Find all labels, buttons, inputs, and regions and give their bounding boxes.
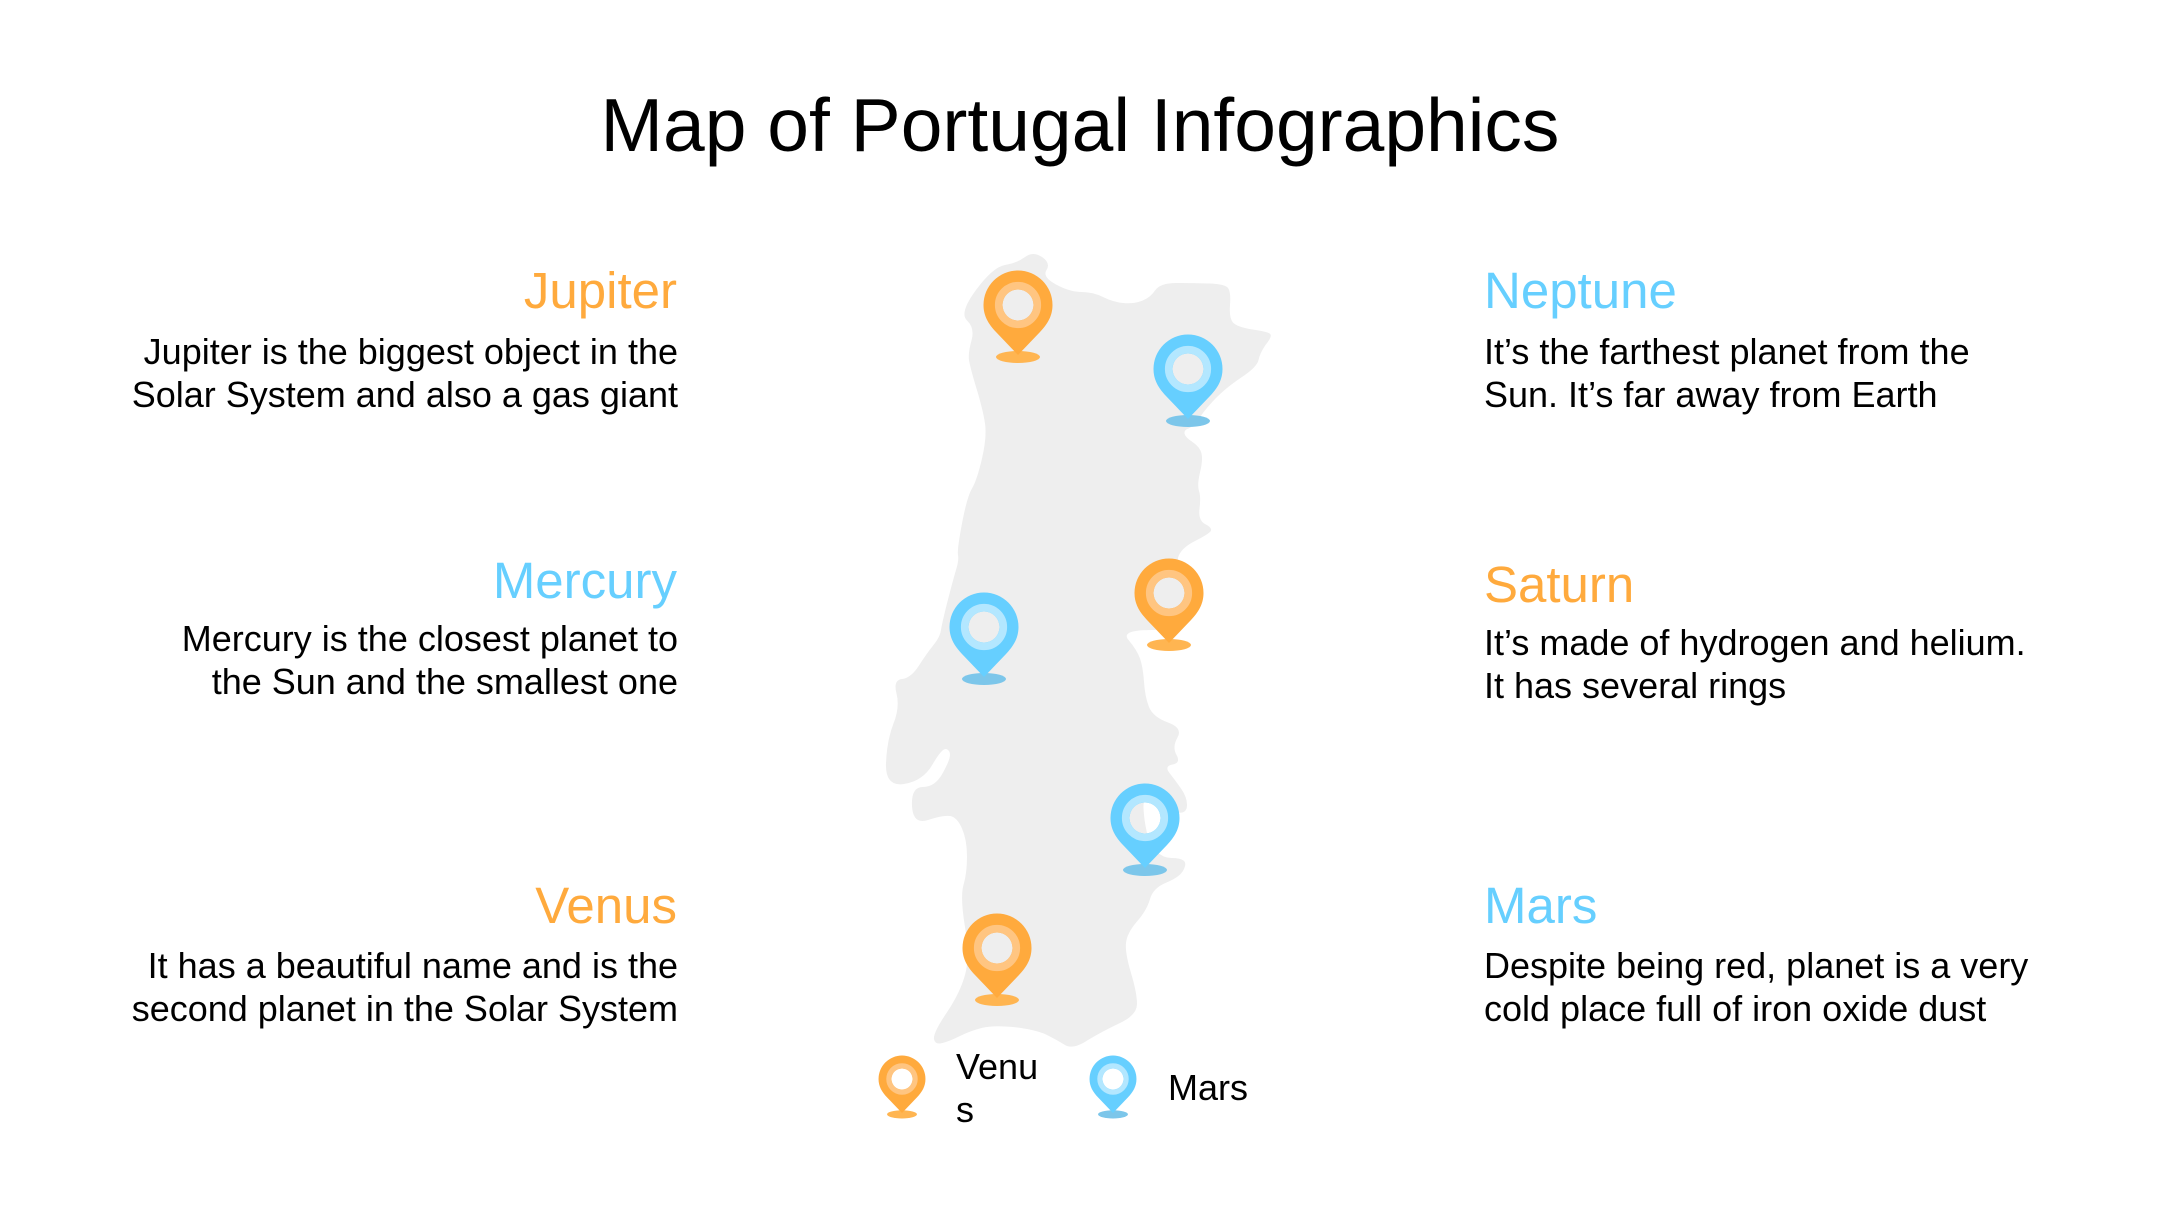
pin: Neptune blue xyxy=(1154,334,1222,427)
text block: Neptune: Sun. It’s far away from Earth xyxy=(1484,374,1938,415)
text block: Venus xyxy=(132,877,678,1029)
text block: Mercury xyxy=(182,552,678,702)
text block: Venus: Venus xyxy=(535,877,677,934)
pin: Mars blue xyxy=(1110,784,1180,876)
text block: Neptune xyxy=(1484,262,1970,415)
pin: Jupiter orange xyxy=(984,270,1052,363)
text block: Mercury: the Sun and the smallest one xyxy=(212,661,678,702)
text block: Saturn: It’s made of hydrogen and helium. xyxy=(1484,622,2026,663)
text block: Mars xyxy=(1484,877,2028,1029)
text block: Jupiter: Jupiter xyxy=(524,262,677,319)
text block: Venus: It has a beautiful name and is the xyxy=(148,945,678,986)
text block: Mars: Mars xyxy=(1484,877,1597,934)
text block: Saturn xyxy=(1484,556,2026,706)
legend label: Mars: Mars xyxy=(1168,1067,1248,1108)
text block: Neptune: It’s the farthest planet from the xyxy=(1484,331,1970,372)
legend label: Venus: Venu xyxy=(956,1046,1038,1087)
legend label: Venus: s xyxy=(956,1089,974,1130)
legend icon: Venus pin xyxy=(879,1056,925,1118)
map of Portugal xyxy=(886,254,1271,1047)
text block: Mars: Despite being red, planet is a very xyxy=(1484,945,2028,986)
pin: Saturn orange xyxy=(1134,558,1204,651)
pin: Venus orange xyxy=(962,914,1032,1006)
text block: Venus: second planet in the Solar System xyxy=(132,988,678,1029)
text block: Jupiter xyxy=(132,262,678,415)
title: Map of Portugal Infographics xyxy=(601,83,1559,167)
text block: Mercury: Mercury xyxy=(493,552,677,609)
pin: Mercury blue xyxy=(950,592,1018,685)
text block: Mars: cold place full of iron oxide dust xyxy=(1484,988,1986,1029)
text block: Jupiter: Solar System and also a gas giant xyxy=(132,374,678,415)
legend icon: Mars pin xyxy=(1090,1056,1136,1118)
legend label: Venus xyxy=(956,1046,1038,1130)
text block: Saturn: It has several rings xyxy=(1484,665,1786,706)
text block: Neptune: Neptune xyxy=(1484,262,1677,319)
text block: Mercury: Mercury is the closest planet to xyxy=(182,618,678,659)
text block: Saturn: Saturn xyxy=(1484,556,1634,613)
text block: Jupiter: Jupiter is the biggest object in the xyxy=(144,331,678,372)
